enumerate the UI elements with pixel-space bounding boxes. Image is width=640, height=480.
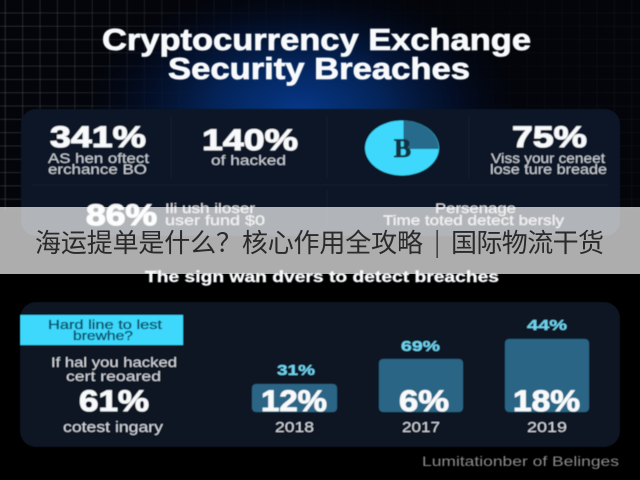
bar: 2018: 31% — [277, 362, 315, 379]
stat: 75% — [490, 121, 607, 177]
stat: 341%: AS hen oftect — [48, 150, 149, 166]
icon: bitcoin pie chart: B — [394, 134, 411, 163]
stat: 86% — [86, 199, 265, 232]
stat: 61%: 61% — [79, 385, 149, 418]
stat: 341%: 341% — [50, 121, 146, 154]
stat: 341% — [48, 121, 149, 177]
callout: hard time: brewhe? — [73, 328, 133, 343]
stat: 86%: 86% — [86, 199, 157, 232]
icon: bitcoin pie chart — [365, 120, 439, 176]
stat: 86%: user fund $0 — [165, 212, 265, 228]
stat: 61%: If hal you hacked — [51, 354, 177, 370]
bar: 2018 — [252, 362, 337, 436]
bar: 2019: 44% — [527, 317, 567, 334]
stat: 140% — [202, 124, 298, 168]
callout: hard time: Hard line to lest — [48, 317, 162, 332]
panel: detection chart — [20, 302, 620, 447]
stat: 140%: 140% — [202, 124, 298, 157]
bar: 2017 — [379, 338, 463, 436]
bar: 2017: 2017 — [402, 419, 440, 436]
stat: 61%: cert reoared — [66, 368, 161, 384]
stat: 75%: 75% — [512, 121, 587, 154]
bar: 2018: 2018 — [275, 419, 314, 436]
title — [102, 22, 531, 86]
stat: 140%: of hacked — [211, 152, 286, 168]
title: Security Breaches — [168, 51, 470, 86]
overlay banner: 国际物流干货 — [451, 223, 604, 260]
stat: percentage time — [383, 200, 564, 228]
section heading: The sign wan dvers to detect breaches — [145, 269, 499, 286]
callout: hard time — [20, 315, 183, 345]
stat: 75%: lose ture breade — [490, 161, 607, 177]
stat: 75%: Viss your ceneet — [491, 150, 605, 166]
stat: 61% — [51, 354, 177, 436]
stat: percentage time: Time toted detect bersly — [383, 212, 564, 228]
bar: 2019: 18% — [513, 385, 580, 418]
stat: 341%: erchance BO — [48, 161, 147, 177]
bar: 2019: 2019 — [527, 419, 567, 436]
footer source: Lumitationber of Belinges — [422, 453, 619, 469]
panel: top statistics — [21, 109, 620, 236]
stat: 61%: cotest ingary — [63, 419, 164, 436]
bar: 2019 — [505, 317, 589, 436]
overlay banner — [0, 207, 640, 274]
title: Cryptocurrency Exchange — [102, 22, 531, 57]
bar: 2018: 12% — [261, 385, 327, 418]
stat: 86%: Ili ush iloser — [165, 200, 255, 216]
bar: 2017: 6% — [399, 385, 449, 418]
stat: percentage time: Persenage — [435, 200, 516, 216]
overlay banner: 海运提单是什么？核心作用全攻略 — [35, 223, 423, 260]
bar: 2017: 69% — [401, 338, 440, 355]
